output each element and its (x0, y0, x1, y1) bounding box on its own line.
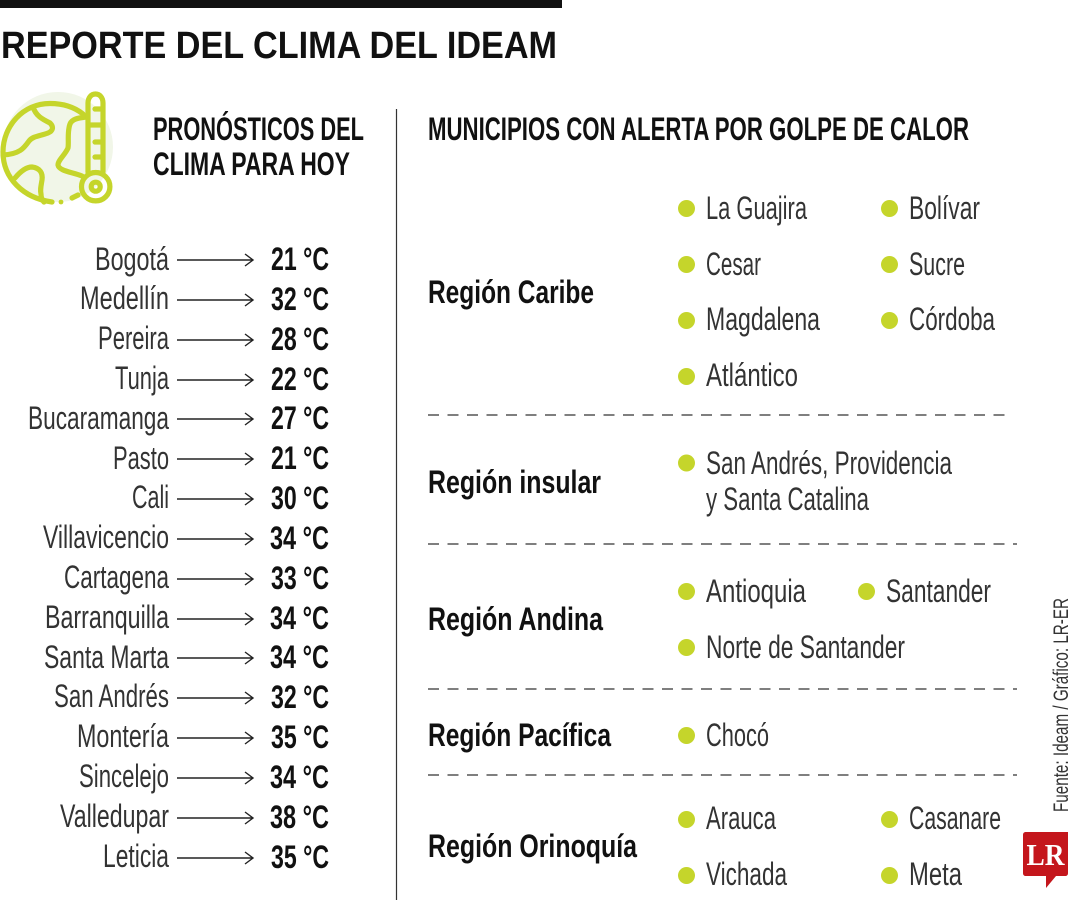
panel: región insular: y Santa Catalina (706, 481, 869, 517)
panel: región Orinoquía: Vichada (706, 856, 787, 892)
temperature list: 35 °C (271, 839, 329, 875)
panel: región Caribe: Cesar (706, 246, 761, 282)
temperature list: 21 °C (271, 440, 329, 476)
top bar (0, 0, 562, 8)
temperature list: 33 °C (271, 560, 329, 596)
temperature list: 28 °C (271, 321, 329, 357)
panel: región Pacífica (428, 717, 769, 753)
panel: región Andina: Región Andina (428, 601, 603, 637)
panel: región Andina: Santander (886, 573, 991, 609)
panel: región Andina (428, 573, 991, 665)
panel: región insular (428, 445, 952, 517)
temperature list: Pasto (113, 440, 169, 476)
temperature list: Cali (132, 479, 169, 515)
panel: región Caribe (428, 190, 995, 393)
temperature list: Medellín (80, 280, 169, 316)
panel: región insular: San Andrés, Providencia (706, 445, 952, 481)
temperature list: 22 °C (271, 361, 329, 397)
panel: región Orinoquía (428, 800, 1001, 892)
temperature list: Montería (77, 718, 169, 754)
temperature list: Pereira (98, 320, 169, 356)
heading: pronósticos: CLIMA PARA HOY (153, 146, 350, 182)
panel: región Orinoquía: Arauca (706, 800, 776, 836)
temperature list: 21 °C (271, 241, 329, 277)
temperature list: 27 °C (271, 400, 329, 436)
panel: región Pacífica: Chocó (706, 717, 769, 753)
temperature list: Tunja (115, 360, 169, 396)
logo: LR (1023, 832, 1068, 888)
panel: región Andina: Norte de Santander (706, 629, 905, 665)
panel: región Caribe: La Guajira (706, 190, 807, 226)
temperature list (28, 241, 329, 875)
divider (396, 109, 398, 900)
temperature list: Cartagena (64, 559, 169, 595)
temperature list: 34 °C (270, 600, 329, 636)
temperature list: 35 °C (271, 719, 329, 755)
temperature list: Villavicencio (43, 519, 169, 555)
temperature list: 34 °C (270, 520, 329, 556)
temperature list: San Andrés (54, 678, 169, 714)
temperature list: 32 °C (271, 281, 329, 317)
temperature list: Sincelejo (79, 758, 169, 794)
source credit: Fuente: Ideam / Gráfico: LR-ER (1050, 598, 1073, 812)
temperature list: Bogotá (95, 241, 169, 277)
temperature list: Santa Marta (44, 639, 169, 675)
panel: región Andina: Antioquia (706, 573, 806, 609)
temperature list: 38 °C (270, 799, 329, 835)
panel: región insular: Región insular (428, 464, 601, 500)
panel: región Orinoquía: Región Orinoquía (428, 828, 637, 864)
panel: región Caribe: Atlántico (706, 357, 798, 393)
temperature list: 34 °C (270, 759, 329, 795)
heading: pronósticos (153, 111, 364, 182)
panel: región Caribe: Magdalena (706, 301, 820, 337)
temperature list: Bucaramanga (28, 400, 169, 436)
panel: región Caribe: Bolívar (909, 190, 980, 226)
heading: pronósticos: PRONÓSTICOS DEL (153, 111, 364, 147)
temperature list: Leticia (103, 838, 169, 874)
temperature list: 32 °C (271, 679, 329, 715)
logo: LR: LR (1026, 837, 1065, 872)
temperature list: Barranquilla (45, 599, 169, 635)
temperature list: 30 °C (271, 480, 329, 516)
panel: región Orinoquía: Casanare (909, 800, 1001, 836)
temperature list: 34 °C (270, 639, 329, 675)
panel: región Orinoquía: Meta (909, 856, 962, 892)
panel: región Caribe: Sucre (909, 246, 965, 282)
title: REPORTE DEL CLIMA DEL IDEAM (1, 25, 557, 67)
panel: región Caribe: Córdoba (909, 301, 995, 337)
icon: globe with thermometer (3, 92, 113, 204)
panel: región Pacífica: Región Pacífica (428, 717, 611, 753)
panel: región Caribe: Región Caribe (428, 274, 594, 310)
temperature list: Valledupar (60, 798, 169, 834)
